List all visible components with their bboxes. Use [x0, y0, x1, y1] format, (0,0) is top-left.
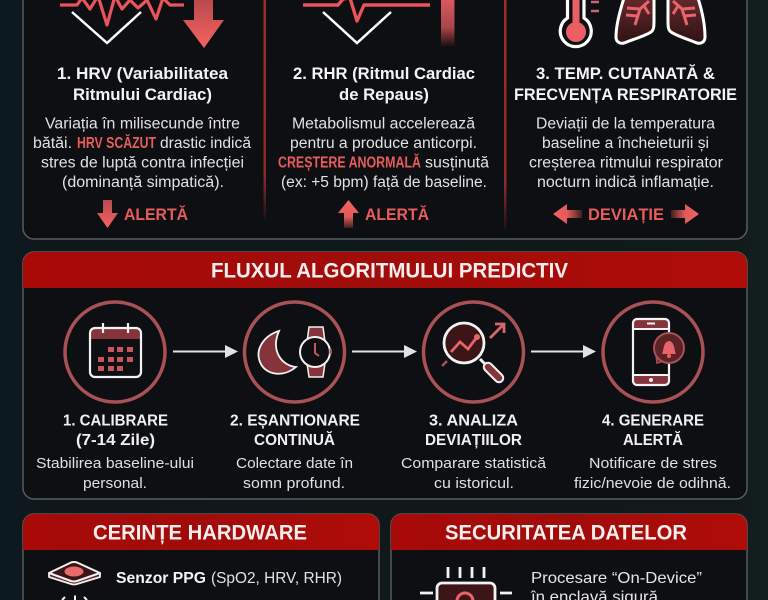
- icon: PPG sensor: [49, 562, 100, 584]
- header: hardware requirements: CERINȚE HARDWARE: [93, 522, 307, 544]
- arrow: step 1 to 2: [173, 345, 238, 358]
- text: step 4: fizic/nevoie de odihnă.: [574, 475, 731, 492]
- icon: RHR waveform with fading bar: [303, 0, 454, 46]
- icon: moon and watch: [244, 302, 344, 402]
- icon: next hardware item: [62, 596, 87, 600]
- text: RHR description: (ex: +5 bpm) față de baseline.: [281, 174, 487, 191]
- text: step 4: 4. GENERARE: [602, 412, 704, 430]
- heading: RHR: de Repaus): [339, 85, 429, 104]
- header: hardware requirements: [23, 514, 379, 550]
- text: RHR description: Metabolismul accelerează: [292, 116, 475, 132]
- header: data security: [391, 514, 747, 550]
- alert: HRV down: [97, 200, 188, 228]
- text: step 2: CONTINUĂ: [254, 430, 335, 449]
- text: HRV description: bătăi.: [33, 135, 72, 152]
- text: step 1: Stabilirea baseline-ului: [36, 455, 194, 472]
- step 4: alert generation: [574, 302, 731, 492]
- icon: phone with bell: [603, 302, 703, 402]
- header: data security: SECURITATEA DATELOR: [445, 522, 687, 544]
- panel: data security: [391, 514, 747, 600]
- text: temperature description: nocturn indică inflamație.: [537, 174, 714, 191]
- text: step 1: 1. CALIBRARE: [63, 412, 168, 430]
- text: HRV description: drastic indică: [160, 135, 251, 152]
- text: on-device processing: Procesare “On-Device”: [531, 570, 702, 587]
- text: temperature description: [529, 116, 723, 191]
- text: PPG sensor: (SpO2, HRV, RHR): [211, 570, 342, 587]
- heading: temperature: [514, 64, 737, 104]
- alert: RHR up: [338, 200, 429, 228]
- column: RHR: [278, 0, 489, 228]
- heading: RHR: 2. RHR (Ritmul Cardiac: [293, 64, 475, 83]
- text: HRV description: stres de luptă contra infecției: [41, 154, 244, 172]
- text: HRV description: HRV SCĂZUT: [77, 135, 156, 152]
- alert: HRV down: ALERTĂ: [124, 205, 188, 224]
- icon: thermometer: [560, 0, 599, 47]
- text: RHR description: [278, 116, 489, 191]
- step 1: calibration: [36, 302, 194, 492]
- text: PPG sensor: [116, 570, 342, 587]
- heading: HRV: Ritmului Cardiac): [73, 85, 212, 104]
- header: predictive algorithm flow: [23, 252, 747, 288]
- text: step 2: 2. EȘANTIONARE: [230, 412, 360, 430]
- text: temperature description: baseline a încheieturii și: [542, 135, 709, 152]
- panel: hardware requirements: [23, 514, 379, 600]
- text: on-device processing: [530, 570, 702, 600]
- text: step 2: somn profund.: [243, 475, 345, 492]
- step 3: deviation analysis: [401, 302, 547, 492]
- text: HRV description: Variația în milisecunde între: [45, 116, 240, 132]
- column: HRV: [33, 0, 251, 228]
- heading: HRV: 1. HRV (Variabilitatea: [57, 64, 229, 83]
- icon: lungs: [616, 0, 705, 43]
- header: predictive algorithm flow: FLUXUL ALGORITMULUI PREDICTIV: [211, 260, 568, 282]
- alert: deviation: [553, 204, 699, 224]
- text: RHR description: pentru a produce anticorpi.: [290, 135, 477, 152]
- text: step 2: Colectare date în: [236, 455, 353, 472]
- column: temperature and respiration: [514, 0, 737, 224]
- heading: temperature: FRECVENȚA RESPIRATORIE: [514, 85, 737, 104]
- heading: HRV: [57, 64, 229, 104]
- alert: deviation: DEVIAȚIE: [588, 205, 664, 224]
- text: RHR description: susținută: [425, 154, 489, 172]
- text: HRV description: [33, 116, 251, 191]
- icon: HRV waveform with down arrow: [60, 0, 224, 48]
- text: step 1: personal.: [83, 475, 147, 492]
- icon: secure chip: [420, 567, 512, 600]
- text: step 4: ALERTĂ: [623, 430, 683, 449]
- text: temperature description: creșterea ritmului respirator: [529, 154, 723, 172]
- panel: predictive algorithm flow: [23, 252, 747, 499]
- text: HRV description: (dominanță simpatică).: [62, 174, 224, 191]
- text: step 3: Comparare statistică: [401, 455, 547, 472]
- text: step 4: [574, 412, 731, 492]
- text: step 3: DEVIAȚIILOR: [425, 432, 522, 449]
- heading: RHR: [293, 64, 475, 104]
- text: step 3: [401, 412, 547, 492]
- step 2: continuous sampling: [230, 302, 360, 492]
- text: PPG sensor: Senzor PPG: [116, 570, 206, 587]
- text: step 1: [36, 412, 194, 492]
- icon: magnifier with trend: [424, 302, 524, 402]
- text: step 3: 3. ANALIZA: [429, 412, 518, 430]
- panel: biomarkers: [23, 0, 747, 239]
- text: RHR description: CREȘTERE ANORMALĂ: [278, 154, 421, 172]
- text: step 4: Notificare de stres: [589, 455, 717, 472]
- text: temperature description: Deviații de la temperatura: [536, 116, 715, 132]
- arrow: step 3 to 4: [531, 345, 596, 358]
- text: step 1: (7-14 Zile): [76, 432, 155, 449]
- alert: RHR up: ALERTĂ: [365, 205, 429, 224]
- icon: calendar: [65, 302, 165, 402]
- text: step 3: cu istoricul.: [434, 475, 514, 492]
- text: step 2: [230, 412, 360, 492]
- heading: temperature: 3. TEMP. CUTANATĂ &: [536, 64, 715, 83]
- arrow: step 2 to 3: [352, 345, 417, 358]
